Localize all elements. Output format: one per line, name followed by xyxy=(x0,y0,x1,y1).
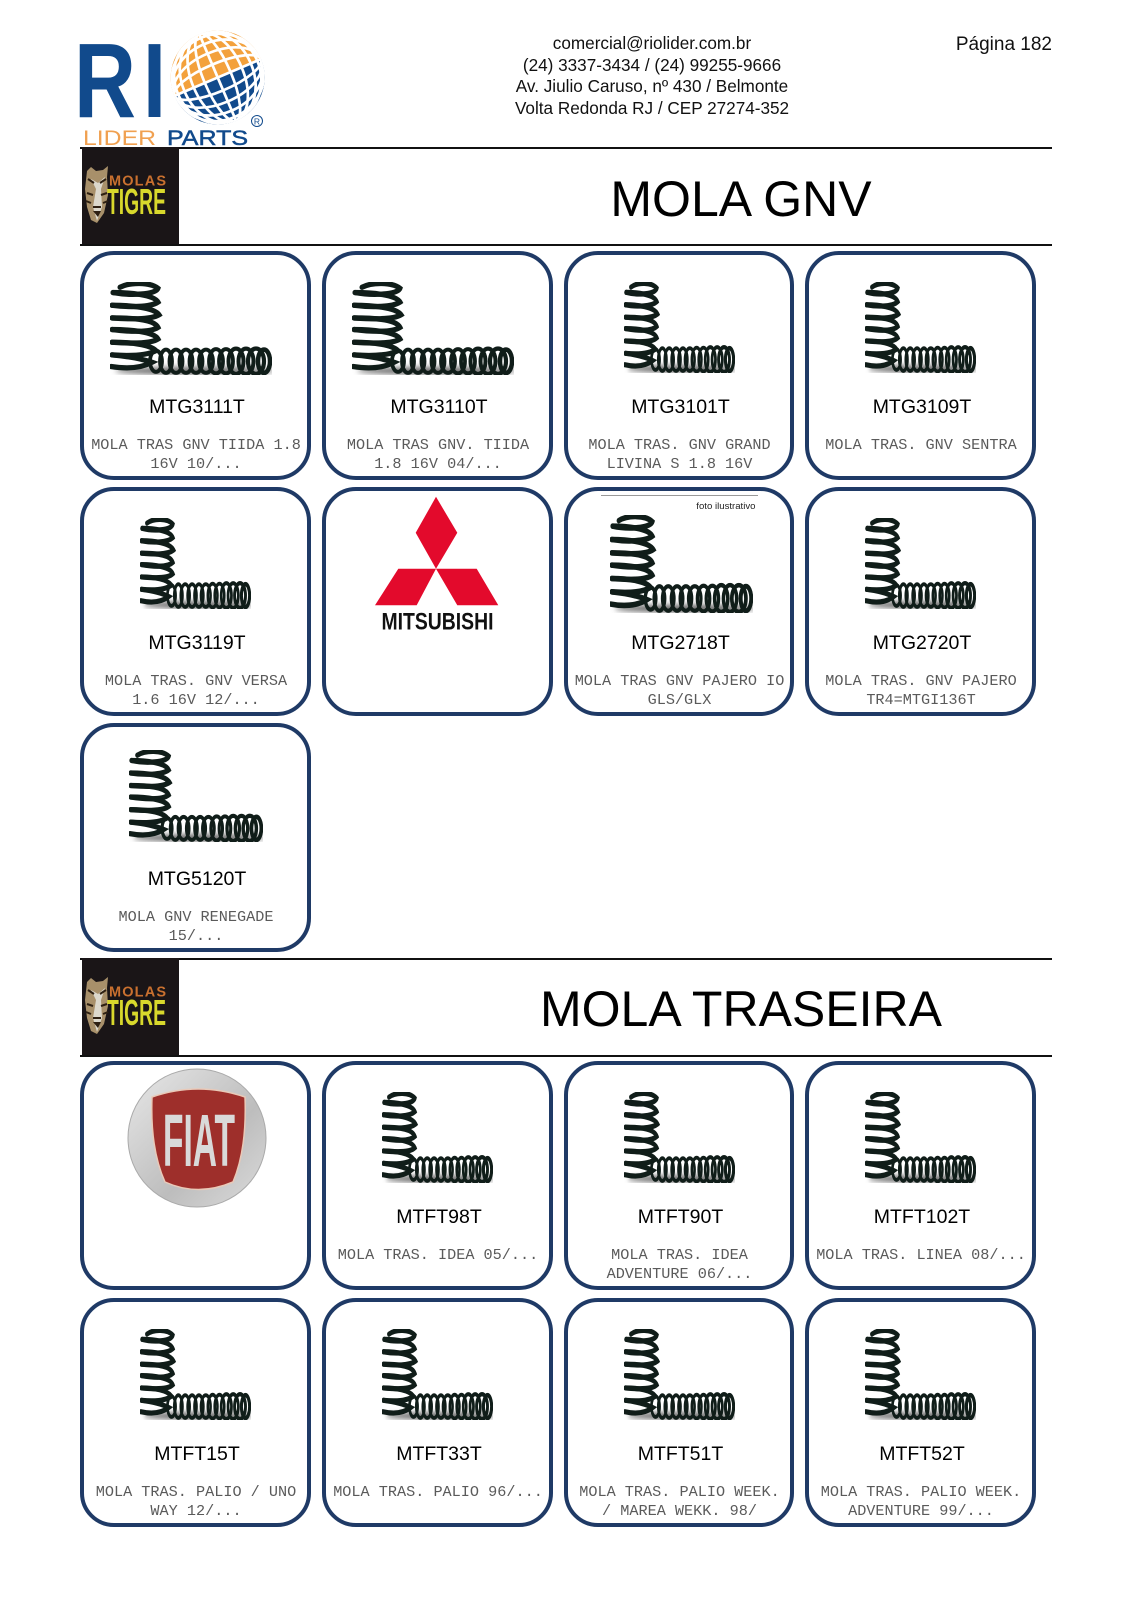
description: TR4=MTGI136T xyxy=(866,691,976,709)
photo caption rule xyxy=(600,495,758,496)
logo wordmark: LIDER xyxy=(83,127,156,150)
contact details: Volta Redonda RJ / CEP 27274-352 xyxy=(515,98,789,118)
spring photo xyxy=(610,515,753,613)
card: MTFT102T xyxy=(805,1061,1036,1290)
description xyxy=(91,436,301,473)
description: MOLA TRAS GNV TIIDA 1.8 xyxy=(91,436,301,454)
description: GLS/GLX xyxy=(648,691,711,709)
part code: MTG3111T xyxy=(149,396,245,418)
spring photo xyxy=(110,282,272,375)
spring photo xyxy=(865,1329,976,1420)
card: MTG3111T xyxy=(80,251,310,480)
description xyxy=(588,436,771,473)
Mitsubishi logo xyxy=(375,496,498,636)
description: MOLA TRAS GNV. TIIDA xyxy=(347,436,529,454)
description: ADVENTURE 99/... xyxy=(848,1502,994,1520)
logo wordmark xyxy=(83,127,248,150)
description: MOLA TRAS. IDEA 05/... xyxy=(338,1246,538,1264)
spring photo xyxy=(624,282,735,373)
description: MOLA TRAS. PALIO WEEK. xyxy=(579,1483,780,1501)
card: MTFT90T xyxy=(564,1061,794,1290)
card: MTFT52T xyxy=(805,1298,1036,1527)
description: WAY 12/... xyxy=(150,1502,242,1520)
description: MOLA TRAS. GNV PAJERO xyxy=(825,672,1017,690)
part code: MTFT90T xyxy=(638,1206,723,1228)
part code: MTFT98T xyxy=(396,1206,482,1228)
part code: MTG5120T xyxy=(148,868,246,890)
card: MTG3109T xyxy=(805,251,1036,480)
spring photo xyxy=(382,1092,493,1183)
part code: MTG3110T xyxy=(390,396,488,418)
description: MOLA TRAS. PALIO WEEK. xyxy=(821,1483,1021,1501)
description: ADVENTURE 06/... xyxy=(607,1265,752,1283)
description: 1.8 16V 04/... xyxy=(374,455,502,473)
spring photo xyxy=(352,282,514,375)
description: MOLA TRAS. GNV VERSA xyxy=(105,672,287,690)
description xyxy=(119,908,273,945)
spring photo xyxy=(865,282,976,373)
description: MOLA TRAS. LINEA 08/... xyxy=(816,1246,1026,1264)
spring photo xyxy=(624,1092,735,1183)
description xyxy=(821,1483,1021,1520)
card: MTFT33T xyxy=(322,1298,552,1527)
description xyxy=(825,672,1017,709)
description: MOLA GNV RENEGADE xyxy=(119,908,273,926)
section heading: Mola Traseira: MOLA TRASEIRA xyxy=(540,981,942,1037)
card: MTFT51T xyxy=(564,1298,794,1527)
spring photo xyxy=(865,518,976,609)
spring photo xyxy=(865,1092,976,1183)
description: 15/... xyxy=(169,927,223,945)
spring photo xyxy=(624,1329,735,1420)
logo wordmark: PARTS xyxy=(167,127,248,150)
card: MTG2718T xyxy=(564,487,794,716)
description xyxy=(575,672,784,709)
part code: MTG3119T xyxy=(148,632,246,654)
registered mark xyxy=(252,116,262,126)
description: LIVINA S 1.8 16V xyxy=(607,455,752,473)
Fiat logo xyxy=(128,1068,266,1208)
part code: MTFT102T xyxy=(874,1206,970,1228)
contact details xyxy=(515,33,789,118)
description: MOLA TRAS. GNV GRAND xyxy=(588,436,771,454)
card: MTG3110T xyxy=(322,251,552,480)
part code: MTG2718T xyxy=(631,632,730,654)
card: MTG5120T xyxy=(80,723,310,952)
part code: MTG3101T xyxy=(631,396,730,418)
card: MTG3119T xyxy=(80,487,310,716)
part code: MTG2720T xyxy=(873,632,971,654)
description: / MAREA WEKK. 98/ xyxy=(602,1502,757,1520)
part code: MTFT15T xyxy=(154,1443,240,1465)
brand logo: Molas Tigre xyxy=(82,147,179,244)
logo: Rio Lider Parts xyxy=(78,28,265,150)
description: MOLA TRAS. PALIO 96/... xyxy=(333,1483,543,1501)
spring photo xyxy=(140,1329,251,1420)
card: MTG3101T xyxy=(564,251,794,480)
card: MTFT98T xyxy=(322,1061,552,1290)
description xyxy=(347,436,530,473)
card: MTG2720T xyxy=(805,487,1036,716)
description xyxy=(606,1246,752,1283)
registered mark: R xyxy=(254,116,260,126)
description: MOLA TRAS. PALIO / UNO xyxy=(96,1483,296,1501)
part code: MTG3109T xyxy=(873,396,971,418)
card: Mitsubishi brand xyxy=(322,487,552,716)
contact details: comercial@riolider.com.br xyxy=(553,33,751,53)
spring photo xyxy=(382,1329,493,1420)
section heading: Mola GNV: MOLA GNV xyxy=(610,171,872,227)
Mitsubishi logo: MITSUBISHI xyxy=(382,608,494,636)
description: 16V 10/... xyxy=(150,455,242,473)
part code: MTFT51T xyxy=(638,1443,723,1465)
description: 1.6 16V 12/... xyxy=(132,691,260,709)
contact details: Av. Jiulio Caruso, nº 430 / Belmonte xyxy=(516,76,788,96)
card: Fiat brand xyxy=(80,1061,310,1290)
description: MOLA TRAS. GNV SENTRA xyxy=(825,436,1017,454)
description: MOLA TRAS. IDEA xyxy=(611,1246,748,1264)
part code: MTFT33T xyxy=(396,1443,482,1465)
spring photo xyxy=(140,518,251,609)
logo globe xyxy=(170,30,265,124)
spring photo xyxy=(129,750,263,842)
description xyxy=(96,1483,296,1520)
photo caption: foto ilustrativo xyxy=(696,501,756,512)
description xyxy=(105,672,288,709)
brand logo: Molas Tigre xyxy=(82,958,179,1055)
description xyxy=(579,1483,780,1520)
part code: MTFT52T xyxy=(879,1443,965,1465)
page number: Página 182 xyxy=(956,34,1052,55)
description: MOLA TRAS GNV PAJERO IO xyxy=(575,672,784,690)
contact details: (24) 3337-3434 / (24) 99255-9666 xyxy=(523,54,781,74)
card: MTFT15T xyxy=(80,1298,310,1527)
